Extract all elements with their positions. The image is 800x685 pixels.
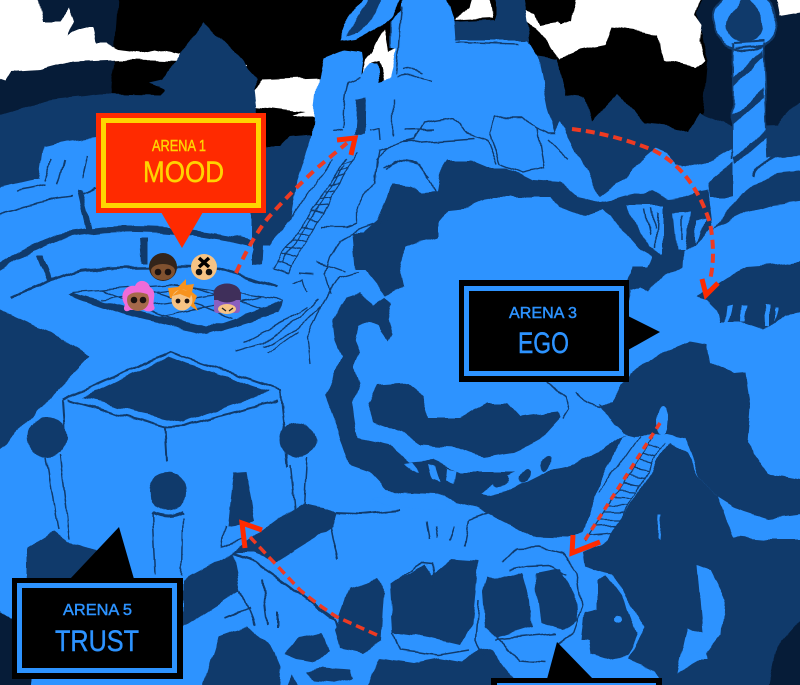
red dashed route 2 to 3 <box>572 129 718 295</box>
callout: arena 5 trust: TRUST <box>55 625 139 658</box>
mouth shadow in central cloud <box>368 383 560 457</box>
distant mountains <box>450 0 800 300</box>
lower right rock mass <box>583 443 800 685</box>
callout: arena 5 trust <box>12 527 183 679</box>
cube arena building <box>27 352 316 575</box>
path edge strokes <box>225 510 400 630</box>
red dashed route 4 to 5 <box>242 523 377 635</box>
character: orange spiky hair <box>168 279 198 311</box>
callout: arena 3 ego: EGO <box>518 327 569 360</box>
dark ring of foliage around central cloud <box>325 160 712 538</box>
waterfalls <box>627 205 707 253</box>
river lines below ego box <box>427 383 598 545</box>
callout: cropped arena 4 box <box>491 642 662 685</box>
rock detached shape <box>582 575 637 660</box>
callout: arena 1 mood <box>96 113 266 248</box>
teeth below mouth <box>405 455 560 496</box>
lower left rocks <box>200 627 353 685</box>
callout: arena 1 mood: MOOD <box>143 156 224 189</box>
callout: arena 3 ego <box>459 280 660 382</box>
dark left rock <box>0 305 90 460</box>
character: purple hat <box>214 284 241 314</box>
right rock mass <box>597 342 800 518</box>
arch outline strokes <box>393 547 582 662</box>
upper terrace arcs and pillars <box>0 156 277 298</box>
dark distant cliffs <box>0 0 800 130</box>
white clouds <box>0 0 800 117</box>
arena 1 platform <box>68 285 283 335</box>
castle doorway <box>355 98 366 135</box>
callout: arena 1 mood: ARENA 1 <box>152 138 206 155</box>
dark walkways <box>27 503 337 627</box>
callout: arena 3 ego: ARENA 3 <box>509 305 577 322</box>
striped tower <box>714 0 776 165</box>
ladder 2 <box>585 435 665 542</box>
tooth shadows <box>492 453 553 490</box>
red dashed route 1 to 2 <box>236 138 355 273</box>
character: dark skin head <box>149 253 177 281</box>
stone arches at the bottom <box>335 560 577 685</box>
root slits <box>725 305 779 327</box>
light highlights in rock <box>614 515 725 673</box>
callout: arena 5 trust: ARENA 5 <box>63 602 132 619</box>
lower left corner shadow <box>0 605 35 685</box>
distant dome and hill <box>0 22 312 320</box>
dish on castle tower <box>339 0 405 75</box>
character: bald head with x <box>191 254 217 280</box>
cracks and paths on left slope <box>237 148 390 363</box>
castle detail lines <box>333 42 568 192</box>
ladder 1 <box>270 153 357 273</box>
character: pink hair <box>122 281 155 311</box>
dark foliage bands on right <box>695 163 800 330</box>
tower base curve line <box>753 150 800 177</box>
ledge under tower path <box>656 406 668 434</box>
central cloud <box>352 197 652 473</box>
light finger under the ring <box>370 495 450 510</box>
red dashed route 3 to 4 <box>572 423 660 553</box>
deepest corner <box>767 610 800 685</box>
